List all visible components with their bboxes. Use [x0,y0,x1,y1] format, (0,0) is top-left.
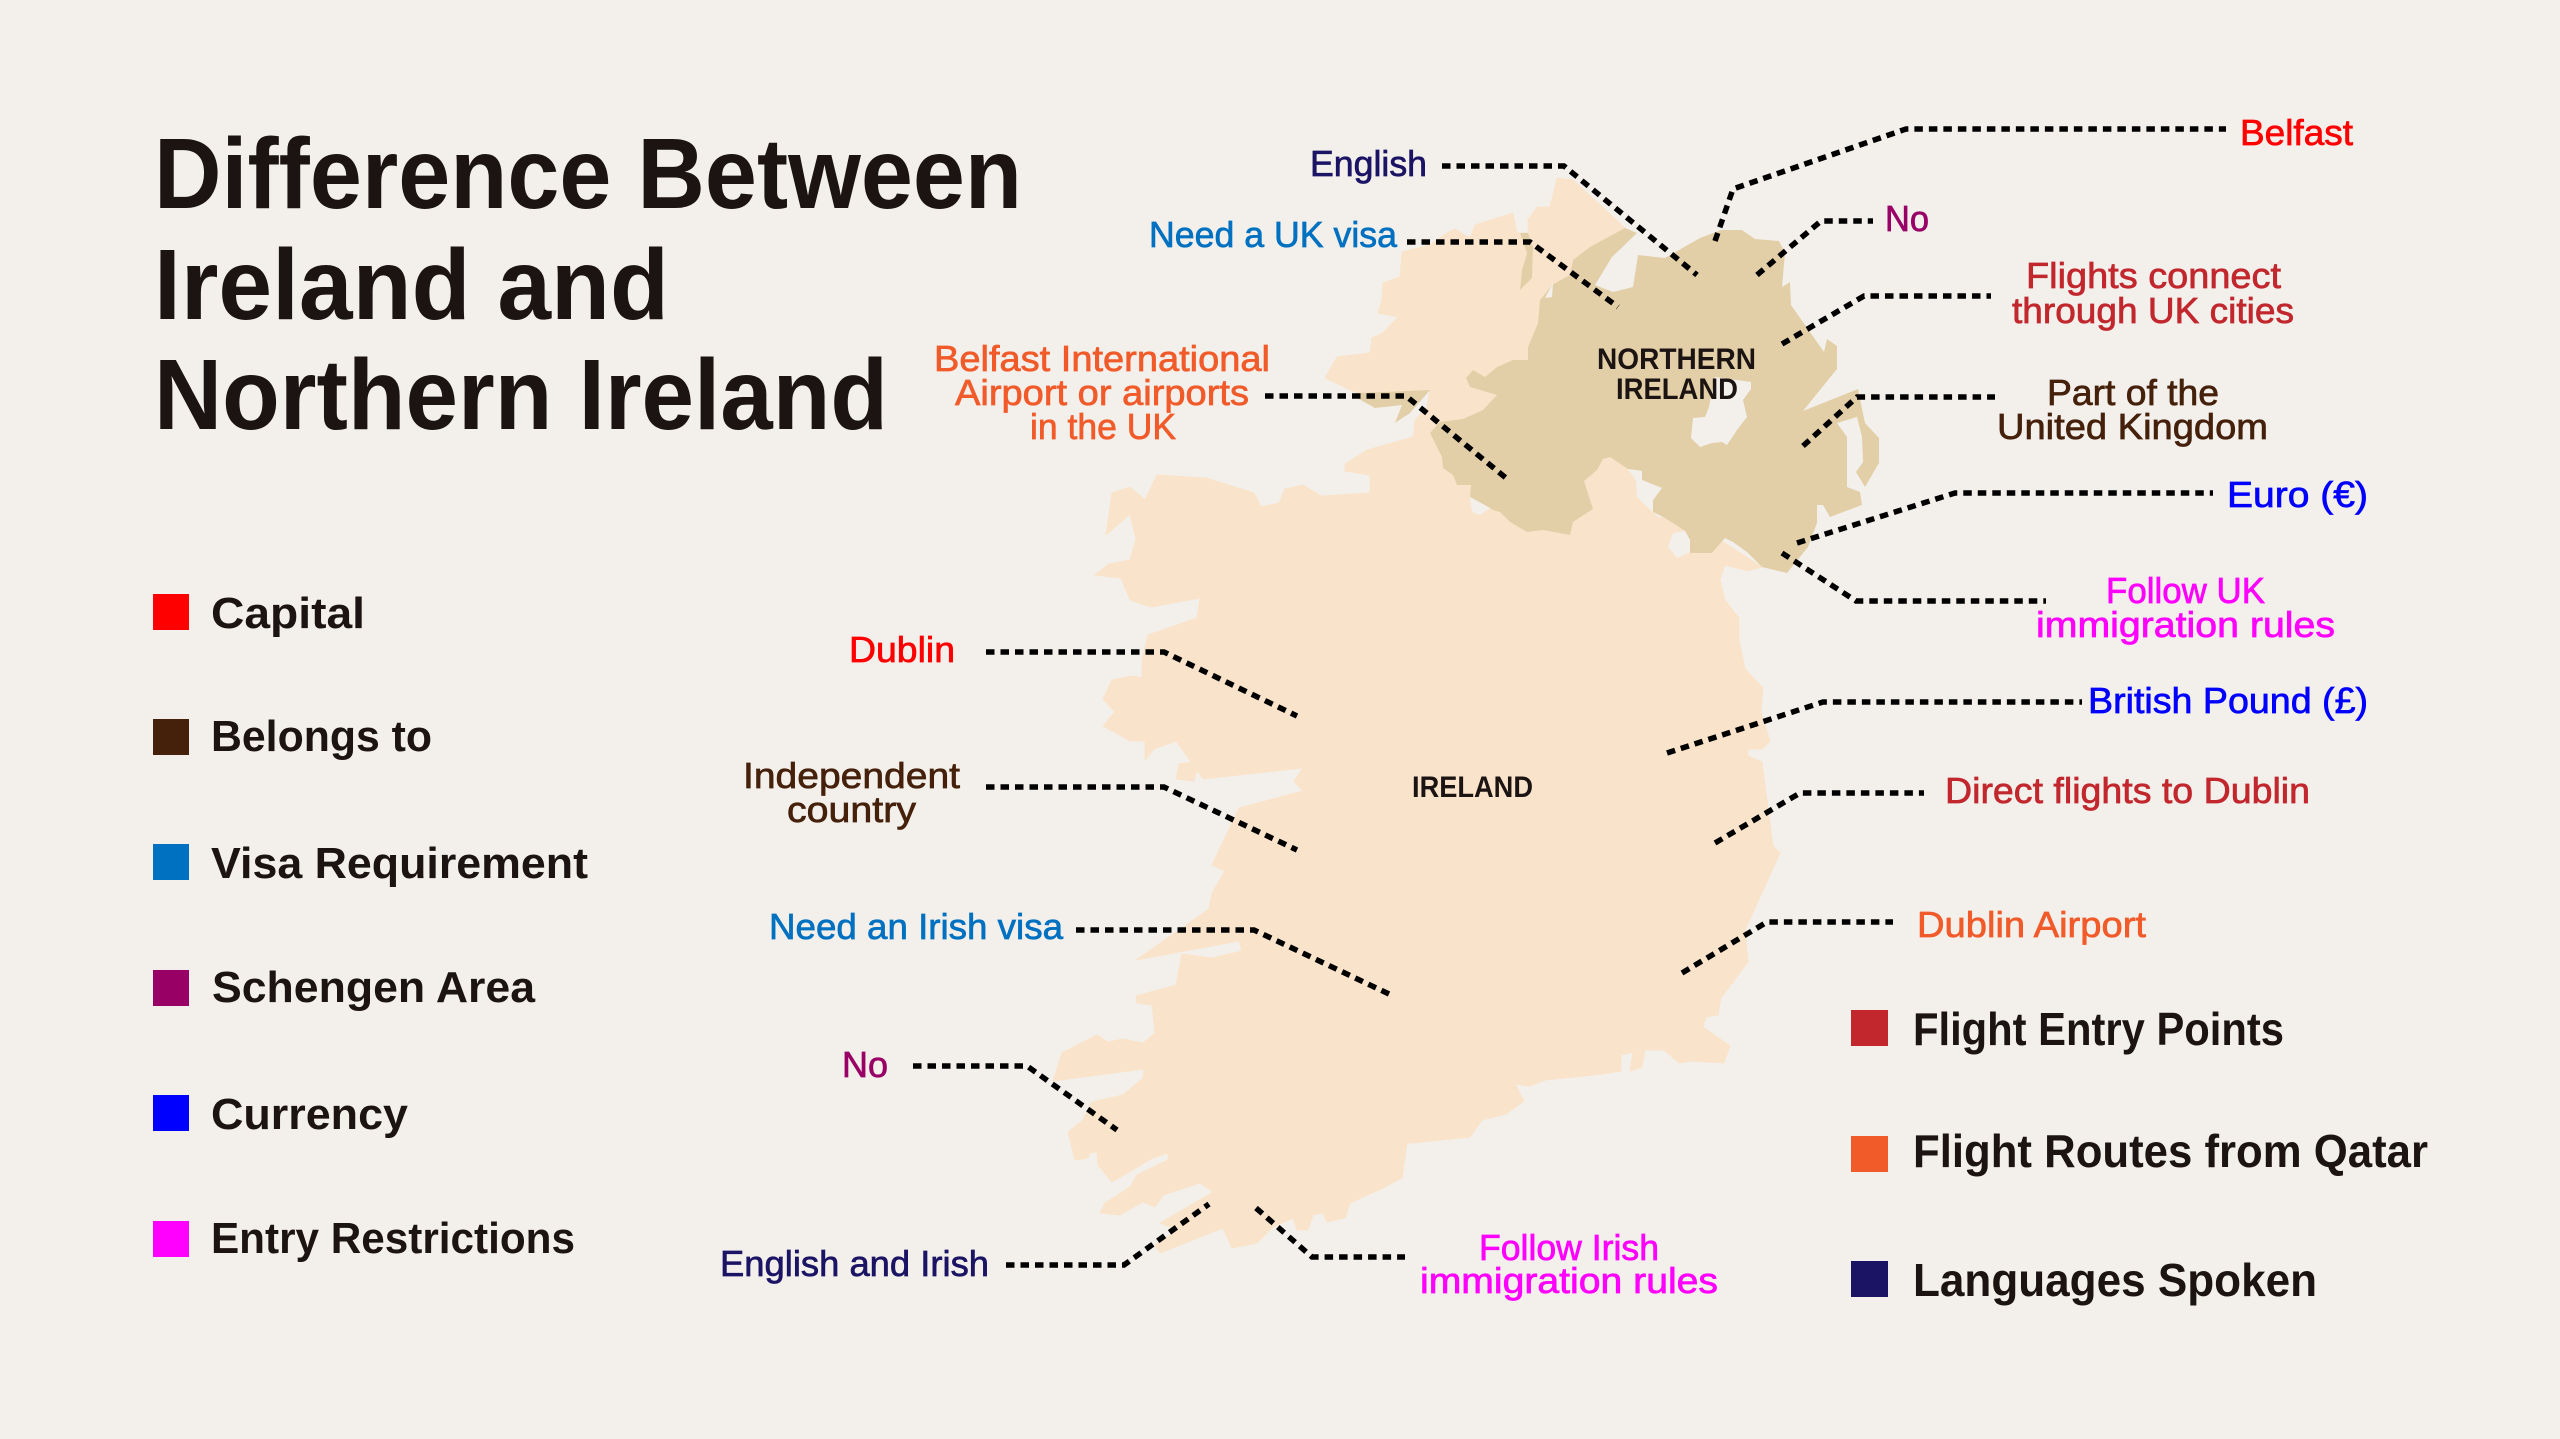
leader: Need an Irish visa [1076,930,1389,994]
label: Belfast International [934,338,1270,447]
label: Follow Irish immigration rules: Follow Irish [1479,1227,1659,1268]
leader: Dublin [986,652,1297,716]
label: English: English [1310,143,1427,184]
region label: Northern Ireland: IRELAND [1616,373,1738,406]
leader: English and Irish [1006,1204,1209,1265]
label: Follow UK immigration rules [2036,570,2335,645]
map region: Donegal south shore [1357,390,1430,423]
label: Independent country: Independent [743,755,960,796]
region label: Ireland: IRELAND [1412,771,1533,804]
dotted leader lines [913,129,2226,1265]
leader: No, Northern Ireland [1757,221,1873,275]
label: Direct flights to Dublin: Direct flights to Dublin [1945,770,2310,811]
leader: No, Ireland [913,1066,1117,1130]
label: Flights connect through UK cities [2012,255,2294,331]
leader: Need a UK visa [1407,242,1618,307]
leader: Follow Irish rules [1256,1208,1405,1257]
legend: flights and languages [1851,1003,2428,1306]
leader: Follow UK rules [1782,553,2046,601]
leader: Dublin Airport [1682,922,1893,973]
region label: Northern Ireland [1597,343,1756,406]
label: Need an Irish visa: Need an Irish visa [769,906,1064,947]
title: Ireland and [154,229,669,341]
map region: Northern Ireland [1430,228,1879,573]
legend item: visa requirement: Visa Requirement [211,839,588,888]
title: Northern Ireland [154,339,888,451]
label: Belfast International: Airport or airports [955,372,1249,413]
map region: Lough Swilly sliver [1520,233,1533,290]
legend item: schengen area: Schengen Area [212,963,536,1012]
label: Independent country: country [787,789,916,830]
label: Follow UK immigration rules: immigration rules [2036,604,2335,645]
title: Difference Between [154,118,1022,230]
legend item: languages spoken: Languages Spoken [1913,1254,2317,1306]
legend item: flight entry points: Flight Entry Points [1913,1003,2284,1055]
label: Part of the United Kingdom: United Kingdom [1997,406,2268,447]
map of the island [1053,178,1879,1253]
label: English and Irish: English and Irish [720,1243,989,1284]
legend item: currency: Currency [211,1090,409,1139]
leader: English [1442,166,1697,275]
label: Belfast International: Belfast International [934,338,1270,379]
leader: Direct flights [1715,793,1924,843]
legend item: capital [153,589,365,638]
label: Follow Irish immigration rules: immigration rules [1420,1260,1718,1301]
label: No, Ireland: No [842,1044,888,1085]
label: Euro: Euro (€) [2227,474,2368,515]
label: British Pound: British Pound (£) [2088,680,2368,721]
leader: Independent country [986,787,1297,850]
legend item: entry restrictions: Entry Restrictions [211,1214,575,1263]
legend item: belongs to: Belongs to [211,712,432,761]
title [154,118,1022,451]
leader: Belfast International [1265,396,1506,478]
legend: categories [153,589,588,1263]
legend item: capital: Capital [211,589,365,638]
leader: British Pound [1667,702,2082,753]
label: Part of the United Kingdom [1997,372,2268,447]
leader: Belfast [1715,129,2226,241]
map feature: border inlets [1400,283,1690,558]
label: Belfast International: in the UK [1030,406,1176,447]
label: Follow Irish immigration rules [1420,1227,1718,1301]
label: No, Northern Ireland: No [1885,198,1929,239]
map region: Republic of Ireland [1053,178,1780,1253]
label: Dublin: Dublin [849,629,955,670]
label: Need a UK visa: Need a UK visa [1149,214,1398,255]
label: Part of the United Kingdom: Part of the [2047,372,2219,413]
label: Independent country [743,755,960,830]
label: Follow UK immigration rules: Follow UK [2106,570,2265,611]
legend item: flight routes from qatar: Flight Routes from Qatar [1913,1125,2428,1177]
label: Dublin Airport: Dublin Airport [1917,904,2146,945]
leader: Part of the United Kingdom [1803,397,1995,446]
map feature: Lough Neagh [1691,377,1751,447]
label: Belfast: Belfast [2240,112,2353,153]
label: Flights connect through UK cities: through UK cities [2012,290,2294,331]
leader: Flights connect [1782,296,1991,344]
label: Flights connect through UK cities: Flights connect [2026,255,2281,296]
leader: Euro [1797,493,2213,543]
region label: Northern Ireland: NORTHERN [1597,343,1756,376]
